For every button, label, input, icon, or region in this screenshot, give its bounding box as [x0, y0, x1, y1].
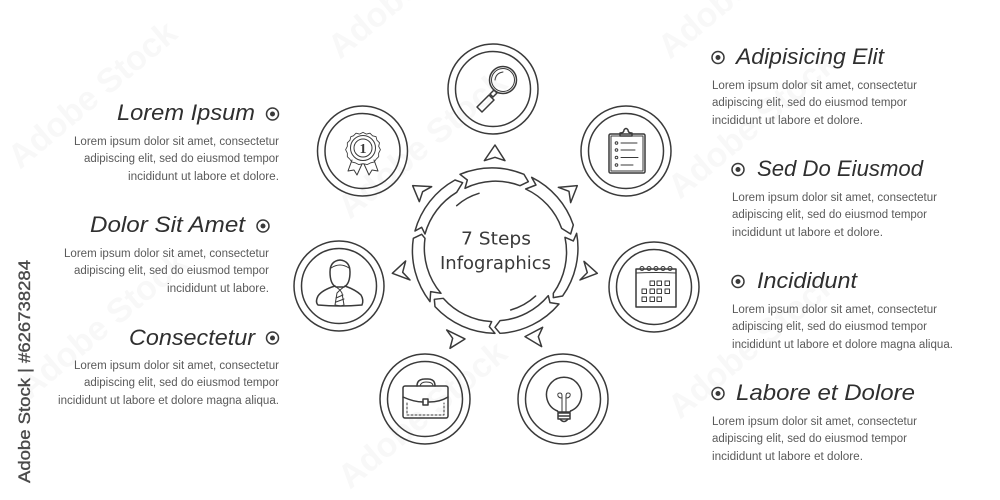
body text: adipiscing elit, sed do eiusmod tempor	[74, 265, 269, 277]
icon badge: light bulb	[518, 354, 608, 444]
body text: Lorem ipsum dolor sit amet, consectetur	[712, 416, 917, 428]
faint watermark: Adobe Stock	[11, 243, 194, 406]
ring segment 5	[434, 298, 495, 333]
faint watermark: Adobe Stock	[331, 63, 514, 226]
heading: Lorem Ipsum	[117, 100, 255, 125]
icon badge: businessman	[294, 241, 384, 331]
body text: incididunt ut labore et dolore.	[732, 227, 883, 239]
heading: Consectetur	[129, 325, 257, 350]
ring highlight upper	[457, 193, 479, 206]
icon badge: briefcase	[380, 354, 470, 444]
center title: 7 Steps	[461, 228, 531, 250]
faint watermark: Adobe Stock	[1, 13, 184, 176]
bullet	[266, 332, 278, 344]
faint watermark: Adobe Stock	[661, 43, 844, 206]
faint watermark: Adobe Stock	[331, 333, 514, 496]
body text: adipiscing elit, sed do eiusmod tempor	[732, 209, 927, 221]
body text	[732, 304, 953, 351]
arrow lower left	[447, 330, 465, 348]
body text: Lorem ipsum dolor sit amet, consectetur	[74, 360, 279, 372]
arrow upper left	[413, 186, 432, 202]
body text: Lorem ipsum dolor sit amet, consectetur	[732, 304, 937, 316]
icon badge: calendar	[609, 242, 699, 332]
bullet	[266, 108, 278, 120]
bullet	[732, 276, 744, 288]
ring segment 2	[526, 177, 573, 234]
bullet	[712, 388, 724, 400]
heading: Sed Do Eiusmod	[757, 156, 924, 181]
body text: adipiscing elit, sed do eiusmod tempor	[84, 153, 279, 165]
direction arrows	[392, 145, 597, 348]
arrow lower right	[525, 327, 543, 347]
body text: Lorem ipsum dolor sit amet, consectetur	[712, 80, 917, 92]
icon badge: clipboard	[581, 106, 671, 196]
icon badge: award medal	[318, 106, 408, 196]
body text: incididunt ut labore.	[167, 283, 269, 295]
body text: incididunt ut labore et dolore magna aliqua.	[732, 339, 953, 351]
body text	[58, 360, 279, 407]
body text	[64, 248, 269, 295]
ring segment 6	[412, 234, 441, 302]
ring segment 3	[553, 233, 578, 298]
heading: Dolor Sit Amet	[90, 212, 246, 237]
faint watermark: Adobe Stock	[661, 263, 844, 426]
body text: incididunt ut labore et dolore magna aliqua.	[58, 395, 279, 407]
heading: Incididunt	[757, 268, 858, 293]
body text: Lorem ipsum dolor sit amet, consectetur	[732, 192, 937, 204]
heading: Labore et Dolore	[736, 380, 915, 405]
center title	[440, 228, 551, 274]
step: Incididunt	[732, 268, 953, 351]
body text: adipiscing elit, sed do eiusmod tempor	[732, 321, 927, 333]
step: Lorem Ipsum	[74, 100, 279, 183]
body text: adipiscing elit, sed do eiusmod tempor	[712, 433, 907, 445]
step: Dolor Sit Amet	[64, 212, 269, 295]
ring segment 1	[460, 168, 528, 188]
step: Labore et Dolore	[712, 380, 917, 463]
body text: adipiscing elit, sed do eiusmod tempor	[712, 97, 907, 109]
ring segment 7	[415, 180, 463, 234]
step: Adipisicing Elit	[712, 44, 917, 127]
body text: incididunt ut labore et dolore.	[712, 115, 863, 127]
icon badge: award medal: 1	[360, 142, 366, 157]
body text	[712, 416, 917, 463]
step: Sed Do Eiusmod	[732, 156, 937, 239]
body text: incididunt ut labore et dolore.	[128, 171, 279, 183]
ring highlight lower	[511, 296, 536, 310]
body text	[74, 136, 279, 183]
ring segment 4	[495, 296, 559, 333]
body text: Lorem ipsum dolor sit amet, consectetur	[64, 248, 269, 260]
body text: incididunt ut labore et dolore.	[712, 451, 863, 463]
step: Consectetur	[58, 325, 279, 407]
arrow right	[580, 261, 597, 280]
arrow top	[484, 145, 505, 161]
bullet	[712, 52, 724, 64]
arrow left	[392, 261, 410, 280]
body text	[712, 80, 917, 127]
body text: Lorem ipsum dolor sit amet, consectetur	[74, 136, 279, 148]
center title: Infographics	[440, 253, 551, 274]
heading: Adipisicing Elit	[734, 44, 885, 69]
bullet	[257, 220, 269, 232]
body text	[732, 192, 937, 239]
body text: adipiscing elit, sed do eiusmod tempor	[84, 377, 279, 389]
arrow upper right	[558, 186, 577, 203]
bullet	[732, 164, 744, 176]
central arrow ring	[412, 168, 578, 333]
icon badge: magnifier	[448, 44, 538, 134]
stock credit: Adobe Stock | #626738284	[15, 260, 34, 483]
